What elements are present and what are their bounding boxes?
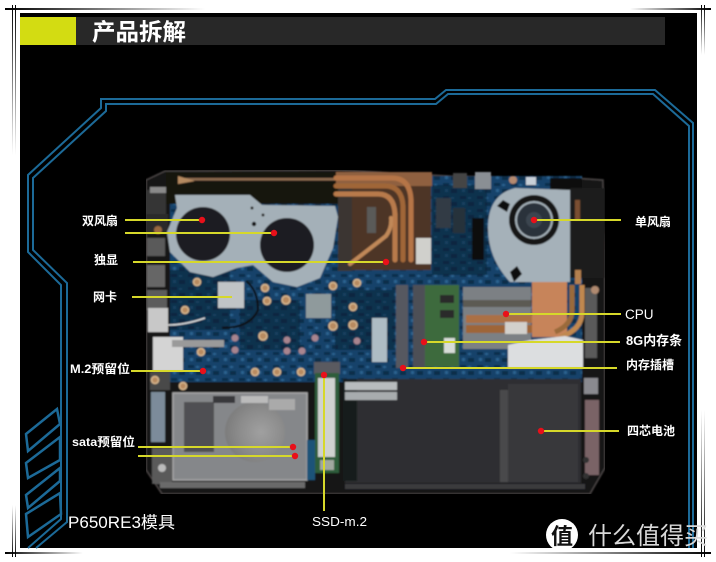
label: dual fan: 双风扇 [82,213,118,228]
dual fan plate [167,195,338,287]
label: memory slot: 内存插槽 [626,357,674,372]
hard drive bay [160,393,315,488]
single fan [488,188,605,284]
header accent block [20,17,76,45]
label: wireless card: 网卡 [93,289,117,304]
left side brackets and ports [146,187,224,484]
header bar [20,17,665,45]
callout lines [125,220,621,511]
tech frame outline [28,90,693,548]
logo wordmark: 什么值得买 [588,523,708,550]
logo glyph: 值 [551,524,573,549]
chassis [146,170,605,494]
GPU chip [306,294,331,318]
frame side stripes [26,409,61,537]
pink capacitors [232,334,360,354]
right blower [260,218,314,272]
top black shroud [166,172,338,204]
watermark logo [546,519,708,551]
laptop teardown photo [146,170,605,494]
copper heatsink [336,172,432,271]
logo badge [546,519,578,551]
motherboard [170,176,582,382]
title: 产品拆解 [92,19,186,45]
board mounting screws [152,278,360,390]
label: battery: 四芯电池 [627,423,675,438]
model name: P650RE3模具 [68,513,175,532]
label: SSD: SSD-m.2 [312,515,367,529]
battery [343,378,599,489]
label: 8G memory: 8G内存条 [626,333,682,348]
left blower [176,207,230,261]
CPU heatsink [463,282,599,368]
memory module [425,285,459,367]
label: M.2 slot: M.2预留位 [70,361,130,376]
label: discrete GPU: 独显 [94,252,118,267]
callout red dots [199,217,544,459]
label: SATA slot: sata预留位 [72,434,135,449]
wifi card [168,281,258,328]
dark board shading [170,185,487,350]
SSD module [314,362,340,473]
header dark strip [76,17,665,45]
right side components [436,172,582,260]
label: CPU: CPU [625,307,654,322]
left labels [70,213,135,449]
memory slots [372,285,425,368]
right labels [625,214,682,438]
label: single fan: 单风扇 [635,214,671,229]
